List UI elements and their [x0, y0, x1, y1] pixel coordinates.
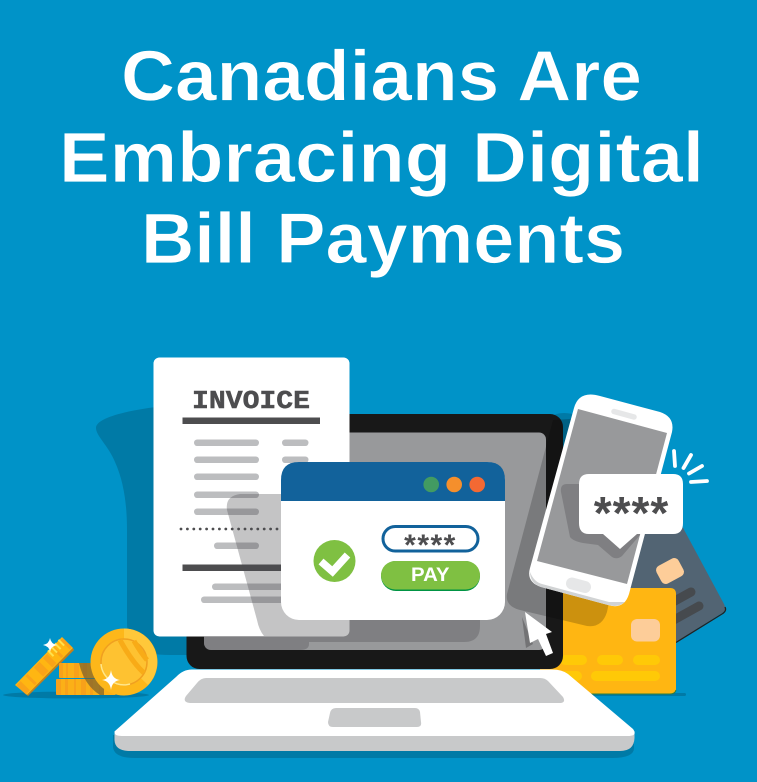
invoice [154, 358, 350, 636]
title: Bill Payments [141, 200, 625, 279]
icon: notification ticks [674, 451, 707, 482]
icon: green check [314, 540, 356, 582]
large coin [90, 628, 158, 696]
laptop screen [186, 414, 563, 669]
pay button [381, 561, 480, 591]
phone shadow [507, 418, 630, 626]
invoice lines [182, 418, 320, 603]
speech bubble: **** [594, 487, 669, 539]
bubble shadow [561, 484, 640, 558]
pay button: PAY [411, 565, 450, 586]
ground shadows [3, 692, 686, 698]
sparkle [43, 638, 57, 652]
background shadow shape [96, 407, 190, 655]
laptop base [113, 670, 635, 758]
phone background shadow [552, 413, 580, 450]
payment window [281, 462, 505, 620]
password field [383, 526, 478, 562]
phone [529, 394, 672, 606]
window buttons [423, 477, 485, 492]
icon: coins [15, 628, 158, 696]
title: Canadians Are [121, 38, 642, 116]
title [59, 38, 704, 279]
coin stack [56, 663, 116, 695]
speech bubble [579, 474, 683, 549]
window shadow [204, 494, 480, 650]
icon: cursor [522, 612, 553, 656]
coin sparkle [102, 670, 120, 690]
password field: **** [404, 529, 457, 562]
leaning coin [15, 637, 74, 696]
icon: dark credit card [600, 520, 726, 642]
window title bar [281, 462, 505, 501]
title: Embracing Digital [59, 119, 704, 198]
invoice heading: INVOICE [192, 386, 310, 416]
icon: yellow credit card [540, 588, 676, 694]
